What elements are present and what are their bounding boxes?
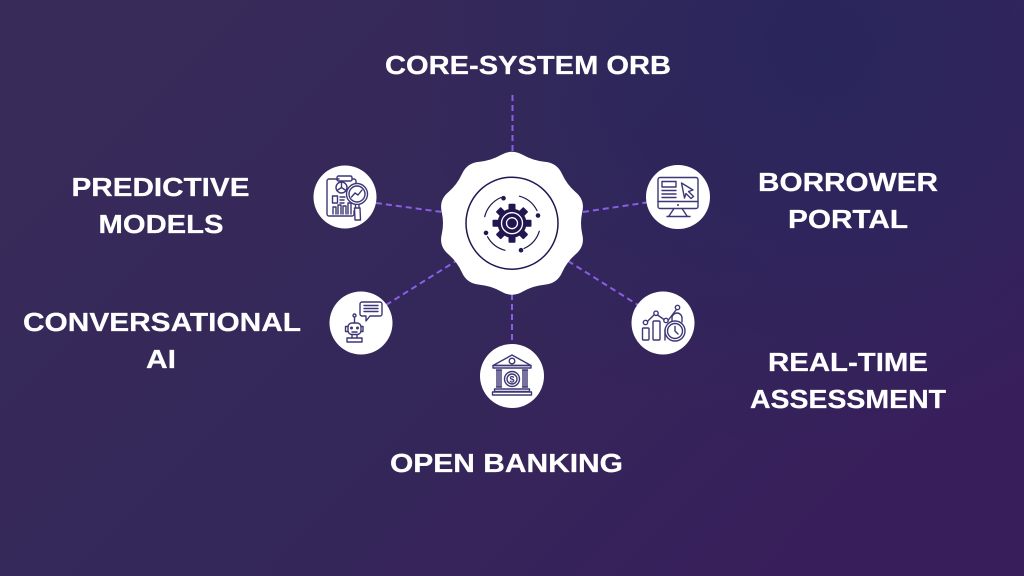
label: conversational AI: AI (146, 344, 176, 374)
label: real-time assessment: REAL-TIME (768, 347, 928, 377)
central orb (441, 152, 583, 295)
label: predictive models: MODELS (98, 209, 224, 239)
label: real-time assessment (750, 347, 946, 414)
icon: gear with orbit arcs (484, 196, 540, 252)
node: open banking icon (480, 344, 544, 408)
coin dollar symbol: $ (509, 374, 515, 384)
orb wavy badge (441, 152, 583, 295)
dashed connectors from hub to nodes (376, 95, 650, 346)
node: predictive models icon (314, 166, 376, 228)
label: borrower portal: PORTAL (788, 204, 908, 234)
label: predictive models: PREDICTIVE (72, 172, 250, 202)
label: real-time assessment: ASSESSMENT (750, 384, 946, 414)
label: borrower portal: BORROWER (758, 167, 938, 197)
label: borrower portal (758, 167, 938, 234)
node: conversational AI icon (330, 292, 392, 354)
label: conversational AI: CONVERSATIONAL (23, 307, 301, 337)
node: borrower portal icon (646, 165, 710, 229)
label: core-system orb: CORE-SYSTEM ORB (385, 50, 671, 80)
label: conversational AI (23, 307, 301, 374)
label: open banking: OPEN BANKING (390, 448, 623, 478)
label: predictive models (72, 172, 250, 239)
orb inner ring (466, 177, 558, 269)
node: real-time assessment icon (632, 292, 694, 354)
